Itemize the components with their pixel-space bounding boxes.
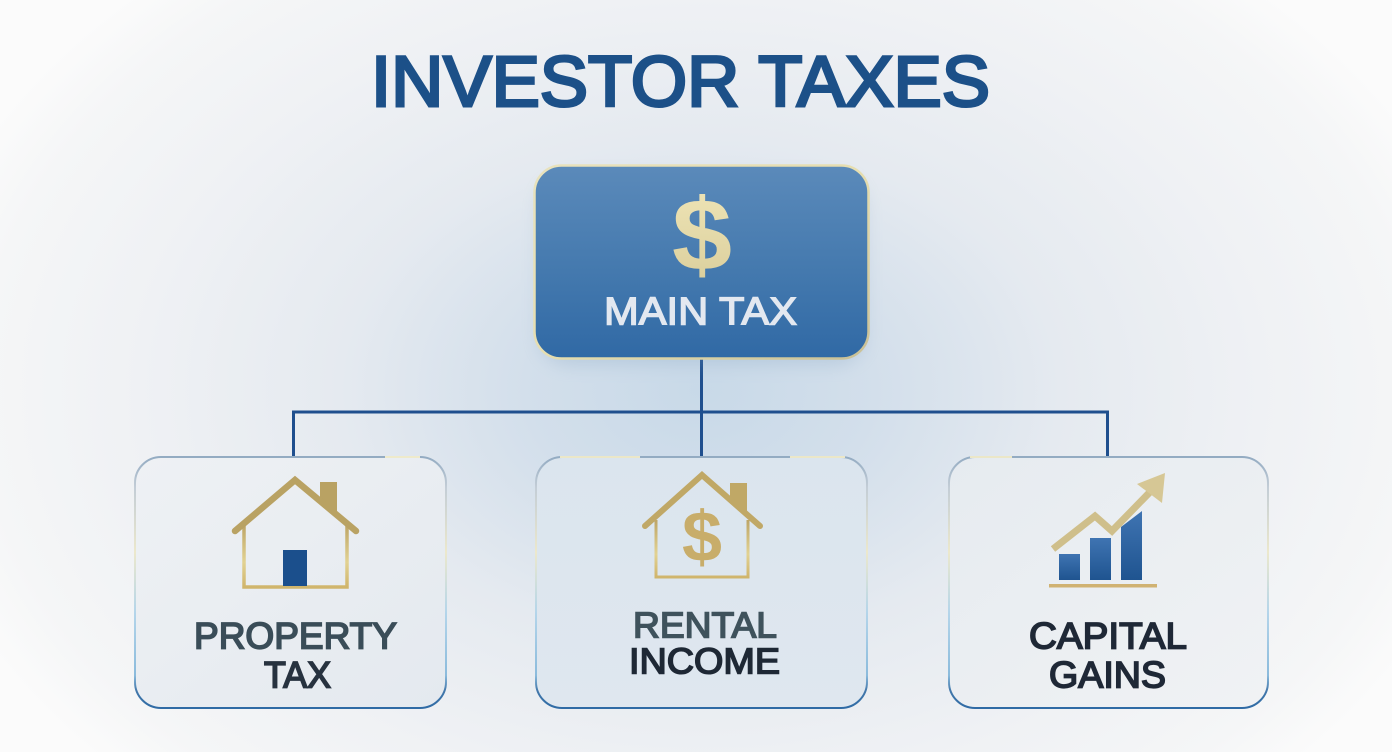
main tax label: MAIN TAX	[604, 290, 797, 334]
capital gains label: CAPITAL	[1029, 616, 1187, 656]
icon: house with dollar	[645, 475, 760, 577]
icon: dollar sign: $	[672, 178, 732, 292]
panel: capital gains	[949, 457, 1268, 708]
capital gains label	[1029, 616, 1187, 696]
capital gains label: GAINS	[1049, 654, 1166, 696]
panel: property tax	[135, 457, 446, 708]
panel: rental income	[536, 457, 867, 708]
property tax label	[194, 616, 397, 696]
property tax label: TAX	[264, 654, 331, 696]
icon: house with dollar: $	[682, 498, 722, 577]
rental income label	[629, 604, 780, 682]
connector lines	[294, 358, 1108, 456]
icon: growth chart	[1049, 473, 1165, 588]
rental income label: RENTAL	[633, 604, 777, 646]
panel: main tax	[534, 166, 868, 364]
title: INVESTOR TAXES	[371, 43, 990, 122]
rental income label: INCOME	[629, 640, 780, 682]
property tax label: PROPERTY	[194, 616, 397, 656]
icon: house with door	[235, 480, 356, 587]
